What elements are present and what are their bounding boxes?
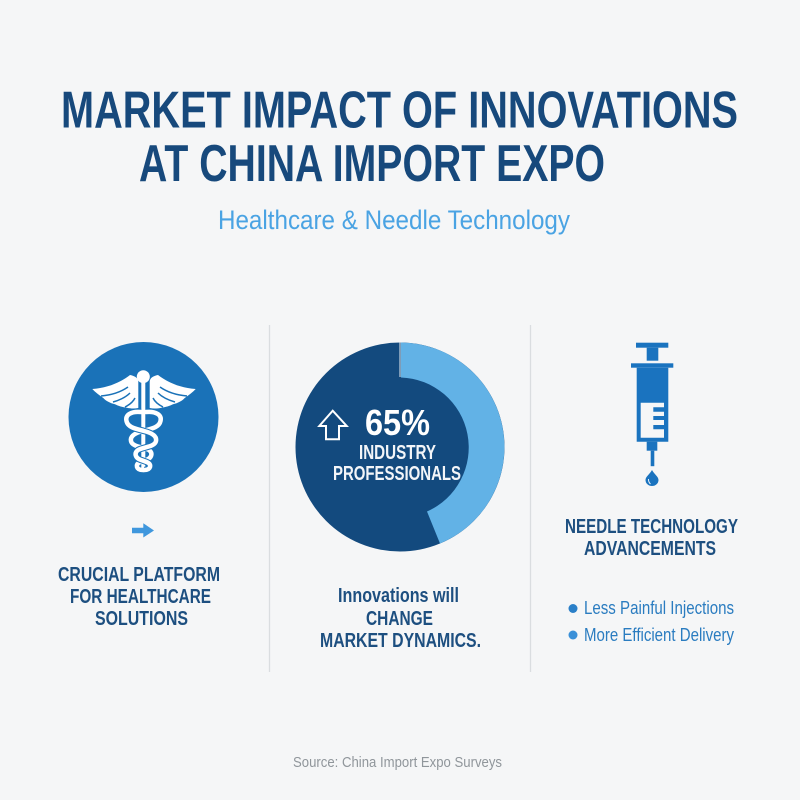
icon: caduceus in circle	[68, 342, 218, 492]
subtitle: Healthcare & Needle Technology	[218, 205, 570, 235]
panel: healthcare platform	[58, 342, 220, 630]
arrow: right	[132, 523, 154, 538]
text: crucial platform: SOLUTIONS	[95, 608, 188, 630]
text: crucial platform: FOR HEALTHCARE	[70, 586, 211, 608]
text: crucial platform	[58, 564, 220, 630]
bullet: more efficient delivery: More Efficient Delivery	[584, 625, 734, 645]
stat: 65%: 65%	[365, 402, 430, 443]
text: needle technology advancements: ADVANCEMENTS	[584, 538, 716, 560]
text: crucial platform: CRUCIAL PLATFORM	[58, 564, 220, 586]
donut chart: 65%	[296, 342, 504, 552]
text: needle technology advancements: NEEDLE TECHNOLOGY	[565, 516, 738, 538]
title	[61, 82, 738, 193]
panel: industry professionals	[296, 342, 504, 652]
text: market dynamics: MARKET DYNAMICS.	[320, 630, 481, 652]
text: market dynamics: Innovations will	[338, 585, 459, 607]
label: industry professionals: INDUSTRY	[359, 442, 437, 464]
label: industry professionals: PROFESSIONALS	[333, 463, 461, 485]
text: market dynamics: CHANGE	[366, 608, 433, 630]
panel: needle technology	[565, 343, 738, 645]
source note: Source: China Import Expo Surveys	[293, 755, 502, 771]
icon: syringe	[631, 343, 673, 486]
text: needle technology advancements	[565, 516, 738, 560]
label: industry professionals	[333, 442, 461, 485]
text: market dynamics	[320, 585, 481, 652]
bullet: less painful injections: Less Painful Injections	[584, 598, 734, 618]
icon: up arrow	[319, 411, 347, 439]
title: AT CHINA IMPORT EXPO	[139, 135, 605, 193]
